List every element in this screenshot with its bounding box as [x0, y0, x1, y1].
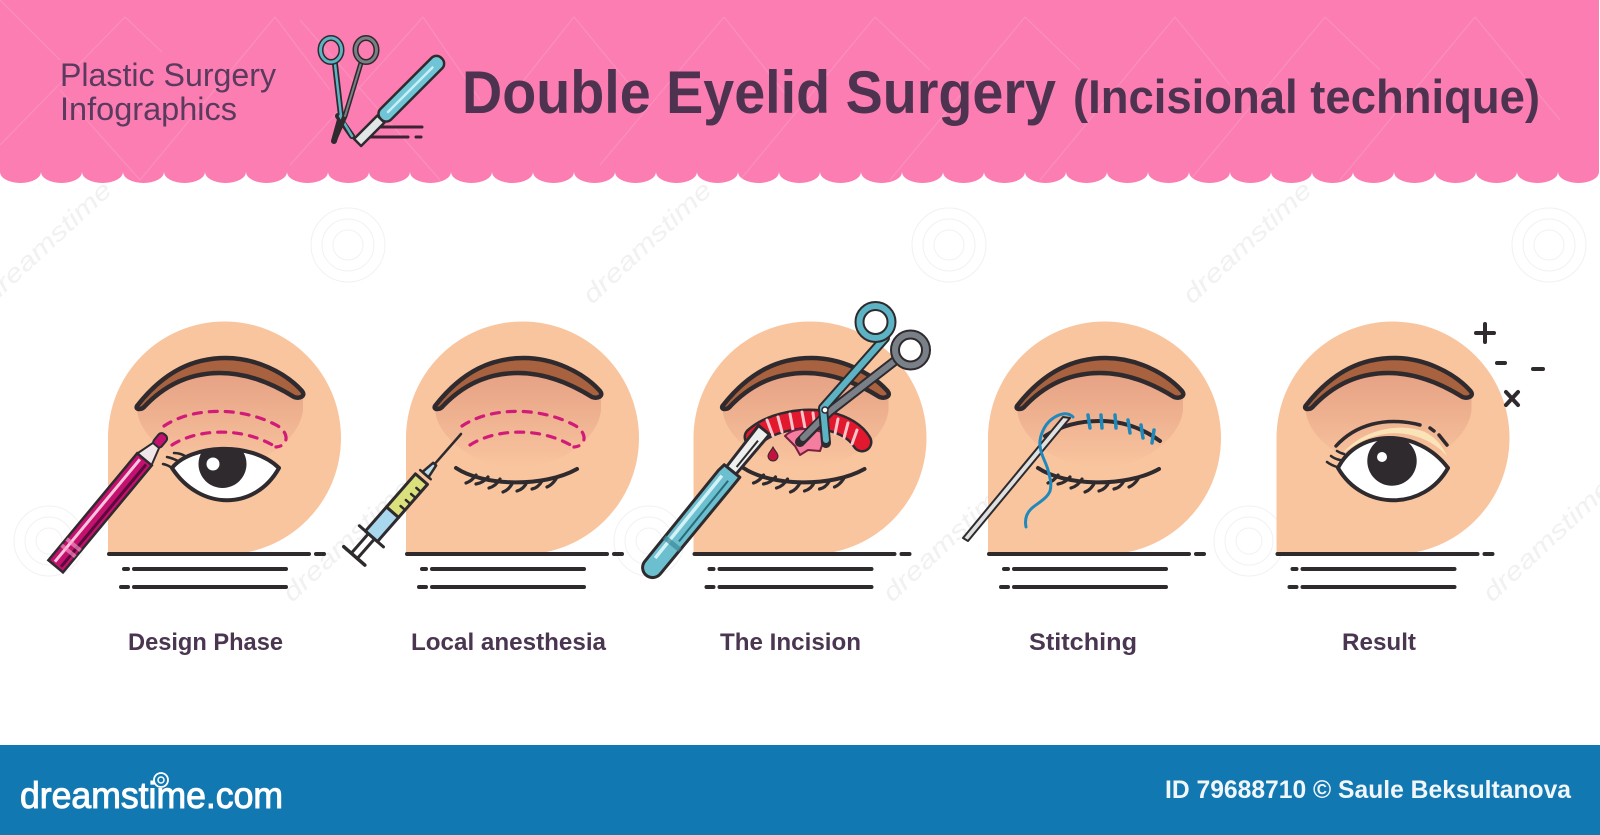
header subtitle: [60, 57, 276, 127]
eyebrow: [1305, 358, 1472, 409]
icon: syringe: [342, 423, 473, 566]
footer bar: [0, 745, 1600, 835]
double eyelid fold: [1336, 422, 1447, 456]
eyebrow: [722, 358, 889, 409]
eyelid shadow: [1306, 360, 1472, 468]
eye bubble background: [406, 321, 639, 554]
caption lines: [694, 554, 910, 587]
icon: surgical scissors: [800, 306, 926, 443]
icon: scalpel: [639, 424, 773, 582]
closed eye with lashes: [456, 468, 577, 492]
watermark wordmarks: dreamstime: [577, 176, 717, 309]
title: (Incisional technique): [1073, 70, 1540, 123]
eye bubble background: [1276, 321, 1510, 554]
icon: marking pencil: [48, 429, 172, 572]
title: Double Eyelid Surgery: [462, 59, 1057, 126]
watermark spirals: [14, 208, 1586, 576]
open eye: [1327, 436, 1448, 500]
step captions: Result: [1342, 629, 1416, 656]
panel: the incision: [639, 306, 926, 587]
title: [462, 59, 1540, 126]
dashed incision marking: [164, 411, 286, 447]
open eye: [163, 440, 279, 500]
eyelid shadow: [722, 360, 888, 468]
panel: result: [1276, 321, 1543, 587]
eyebrow: [137, 358, 303, 409]
eye bubble background: [988, 321, 1221, 554]
stitched incision: [1045, 415, 1160, 443]
step captions: [128, 629, 1416, 656]
panel: design phase: [48, 321, 341, 587]
dashed incision marking: [462, 411, 584, 447]
header subtitle: Infographics: [60, 91, 237, 127]
step captions: Stitching: [1029, 629, 1137, 656]
suture thread: [1026, 414, 1073, 527]
eyebrow: [1017, 358, 1183, 409]
caption lines: [989, 554, 1204, 587]
eyebrow: [435, 358, 601, 409]
eyelid shadow: [1017, 360, 1183, 468]
watermark wordmarks: dreamstime: [277, 474, 417, 607]
eyelid shadow: [435, 360, 601, 468]
footer credit: ID 79688710 © Saule Beksultanova: [1165, 776, 1572, 804]
closed eye with lashes: [744, 468, 864, 492]
header banner: [0, 0, 1599, 183]
caption lines: [109, 554, 324, 587]
caption lines: [407, 554, 622, 587]
watermark wordmarks: dreamstime: [877, 474, 1017, 607]
blood drop: [768, 447, 778, 461]
step captions: The Incision: [720, 629, 861, 656]
eye bubble background: [108, 321, 341, 554]
watermark wordmarks: dreamstime: [1177, 176, 1317, 309]
panel: stitching: [963, 321, 1221, 587]
footer logo: dreamstime.com: [20, 775, 283, 816]
closed eye with lashes: [1038, 468, 1159, 492]
header subtitle: Plastic Surgery: [60, 57, 276, 93]
watermark wordmarks: dreamstime: [1477, 474, 1600, 607]
step captions: Design Phase: [128, 629, 283, 656]
eyelid shadow: [137, 360, 303, 468]
step captions: Local anesthesia: [411, 629, 607, 656]
icon: header scissors and scalpel: [320, 38, 447, 148]
eye bubble background: [694, 321, 926, 554]
icon: needle: [963, 417, 1070, 541]
watermark wordmarks: [0, 176, 1600, 607]
incision wound: [754, 412, 862, 455]
panel: local anesthesia: [342, 321, 639, 587]
sparkle marks: [1476, 324, 1543, 405]
caption lines: [1278, 554, 1492, 587]
